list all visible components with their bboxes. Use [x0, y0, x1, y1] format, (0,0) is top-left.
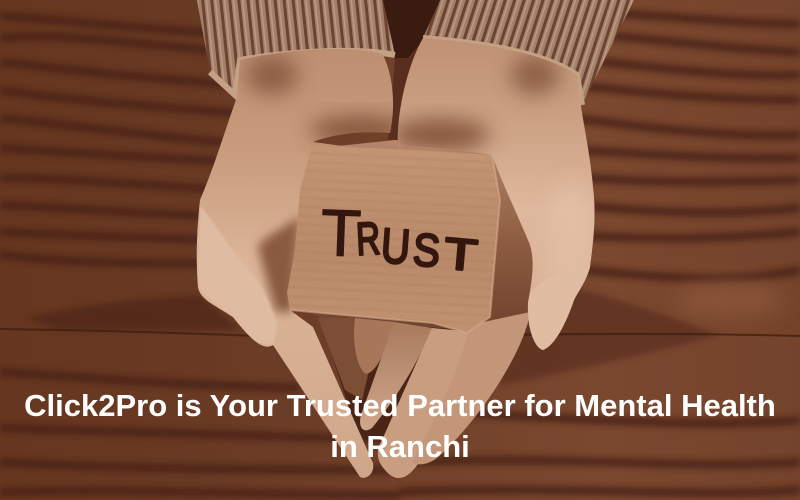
handwritten word on card [320, 195, 479, 281]
dark shadow between fingers [320, 320, 470, 440]
handwritten word on card: T [320, 195, 362, 270]
fourth finger [360, 322, 432, 430]
shaded palm under card [280, 140, 545, 335]
cardboard [287, 142, 500, 333]
right hand [390, 38, 595, 350]
back finger [318, 318, 368, 400]
title: in Ranchi [330, 429, 470, 464]
right thumb [528, 267, 590, 350]
right sleeve [423, 0, 634, 105]
fifth finger [378, 328, 475, 478]
dark gap between wrists [375, 0, 445, 140]
handwritten word on card: S [411, 223, 442, 277]
left thumb highlight [198, 205, 277, 345]
third finger [354, 318, 394, 374]
title: Click2Pro is Your Trusted Partner for Mental Health [24, 388, 776, 423]
handwritten word on card: T [442, 229, 479, 281]
handwritten word on card: R [355, 212, 381, 265]
fingers [318, 312, 530, 478]
left hand [197, 49, 410, 478]
left sleeve [197, 0, 395, 95]
handwritten word on card: U [379, 219, 412, 275]
title [24, 388, 776, 464]
left inner palm shadow [258, 215, 300, 312]
sixth finger [412, 312, 530, 464]
knots in wood [25, 295, 240, 330]
